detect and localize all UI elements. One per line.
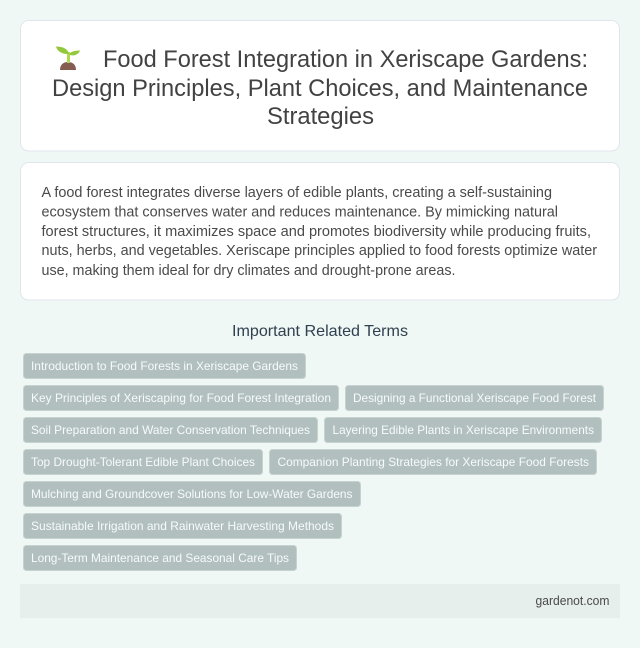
tag: drought-tolerant: Top Drought-Tolerant Edible Plant Choices [31,455,255,469]
tag: key principles: Key Principles of Xeriscaping for Food Forest Integration [31,391,331,405]
panel: title card [20,20,620,151]
tag: mulching: Mulching and Groundcover Solutions for Low-Water Gardens [31,487,352,501]
tag: layering [324,418,602,442]
title: Food Forest Integration in Xeriscape Gardens: [103,46,588,73]
tag: drought-tolerant [24,450,262,474]
tag: introduction [24,354,306,378]
text block: description: ecosystem that conserves water and reduces maintenance. By mimicking natural [42,204,558,220]
text block: description: A food forest integrates diverse layers of edible plants, creating a self-sustaining [42,185,552,201]
title: Strategies [267,103,374,130]
title: Design Principles, Plant Choices, and Maintenance [52,75,588,102]
tag: designing: Designing a Functional Xeriscape Food Forest [353,391,597,405]
tag: designing [346,386,604,410]
panel: description card [20,162,620,300]
tag: maintenance [24,546,296,570]
text block: description [42,185,597,279]
tag: irrigation: Sustainable Irrigation and Rainwater Harvesting Methods [31,519,334,533]
tag: companion planting [270,450,596,474]
footer: site name: gardenot.com [536,594,610,608]
tag: layering: Layering Edible Plants in Xeriscape Environments [332,423,594,437]
tag: companion planting: Companion Planting Strategies for Xeriscape Food Forests [278,455,589,469]
tag: introduction: Introduction to Food Forests in Xeriscape Gardens [31,359,298,373]
text block: description: forest structures, it maximizes space and promotes biodiversity while producing fruits, [42,224,591,240]
panel: term tags [24,354,604,570]
text block: description: use, making them ideal for dry climates and drought-prone areas. [42,263,456,279]
text block: description: nuts, herbs, and vegetables. Xeriscape principles applied to food forests optimize water [42,243,597,259]
tag: maintenance: Long-Term Maintenance and Seasonal Care Tips [31,551,289,565]
footer bar [20,584,620,618]
tag: irrigation [24,514,342,538]
tag: key principles [24,386,338,410]
icon: seedling [56,46,80,70]
tag: mulching [24,482,360,506]
heading: related terms: Important Related Terms [232,323,408,340]
title [52,46,588,130]
tag: soil preparation: Soil Preparation and Water Conservation Techniques [31,423,310,437]
tag: soil preparation [24,418,318,442]
